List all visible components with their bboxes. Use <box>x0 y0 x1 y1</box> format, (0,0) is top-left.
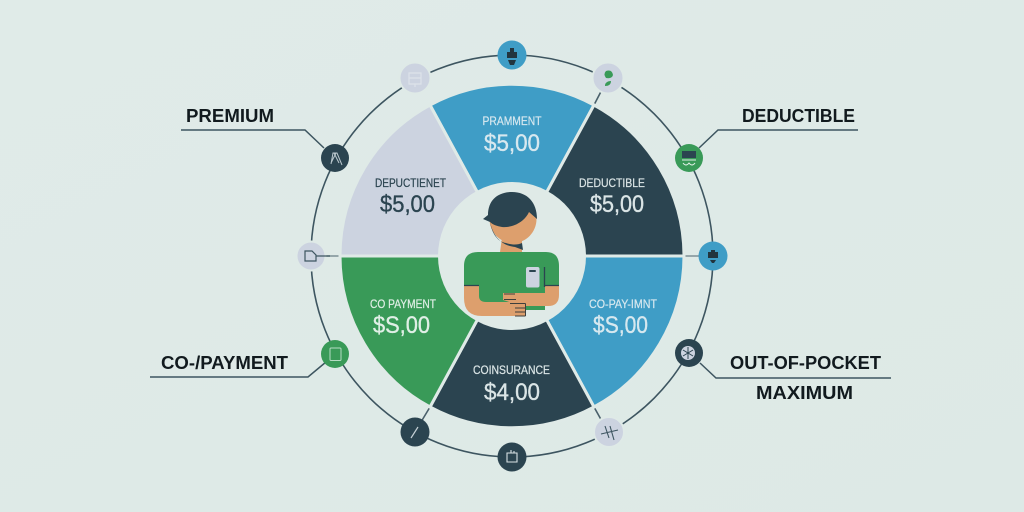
wedge text: top: $5,00 <box>484 130 540 157</box>
callout: deductible: DEDUCTIBLE <box>742 106 855 126</box>
wedge text: lower right: $S,00 <box>593 312 648 339</box>
torso <box>464 252 559 310</box>
left arm <box>464 285 526 316</box>
callout: out-of-pocket maximum: OUT-OF-POCKET <box>730 353 881 373</box>
wedge text: bottom <box>473 365 550 406</box>
outer ring <box>311 55 713 457</box>
icon: notebook <box>321 340 349 368</box>
wedge text: upper right: $5,00 <box>590 191 644 218</box>
wedge text: upper left <box>375 178 446 218</box>
headset line <box>490 222 523 250</box>
callout: deductible <box>699 106 858 148</box>
wedge text: upper right <box>579 178 645 218</box>
wedge text: lower left <box>370 299 436 339</box>
person illustration <box>464 192 559 316</box>
callout: co-payment: CO-/PAYMENT <box>161 353 288 373</box>
center circle <box>438 182 586 330</box>
callout: out-of-pocket maximum: MAXIMUM <box>756 383 853 403</box>
wedge text: lower left: $S,00 <box>373 312 430 339</box>
icon: slash <box>400 418 430 446</box>
callout: out-of-pocket maximum <box>700 353 891 403</box>
phone <box>526 267 540 288</box>
fingers <box>504 294 526 316</box>
wedge text: upper left: DEPUCTIENET <box>375 178 446 190</box>
wedge text: lower right <box>589 299 657 339</box>
callout: premium: PREMIUM <box>186 106 274 126</box>
icon: top person <box>498 40 526 70</box>
wedge: bottom dark <box>430 256 594 428</box>
icon: cart <box>675 144 703 172</box>
wedge: lower right blue <box>512 256 684 407</box>
pie chart <box>340 84 684 428</box>
icon: document <box>296 242 330 270</box>
wedge text: upper right: DEDUCTIBLE <box>579 178 645 190</box>
icon: green leaf <box>592 62 624 94</box>
wedge text: lower left: CO PAYMENT <box>370 299 436 311</box>
icon: briefcase <box>698 242 728 270</box>
wedge text: lower right: CO-PAY-IMNT <box>589 299 657 311</box>
icon: asterisk <box>675 339 703 367</box>
hair <box>483 192 537 227</box>
wedge text: bottom: COINSURANCE <box>473 365 550 377</box>
callout: co-payment <box>150 353 326 377</box>
callout: premium <box>181 106 324 148</box>
icon: clipboard <box>400 62 430 94</box>
wedge: lower left green <box>340 256 512 407</box>
wedge: upper left lavender <box>340 105 512 256</box>
icon: tools <box>321 144 349 172</box>
wedge text: upper left: $5,00 <box>380 191 435 218</box>
wedge: top blue <box>430 84 594 256</box>
head <box>490 195 536 243</box>
neck <box>500 238 522 252</box>
right arm <box>503 285 559 306</box>
clothing lines <box>464 267 559 287</box>
wedge text: top <box>482 116 542 157</box>
spoke connectors <box>311 78 713 432</box>
wedge: upper right dark <box>512 105 684 256</box>
wedge text: bottom: $4,00 <box>484 379 540 406</box>
wedge text: top: PRAMMENT <box>482 116 542 128</box>
icon: bag <box>498 442 526 472</box>
icon: crossed lines <box>594 417 624 447</box>
